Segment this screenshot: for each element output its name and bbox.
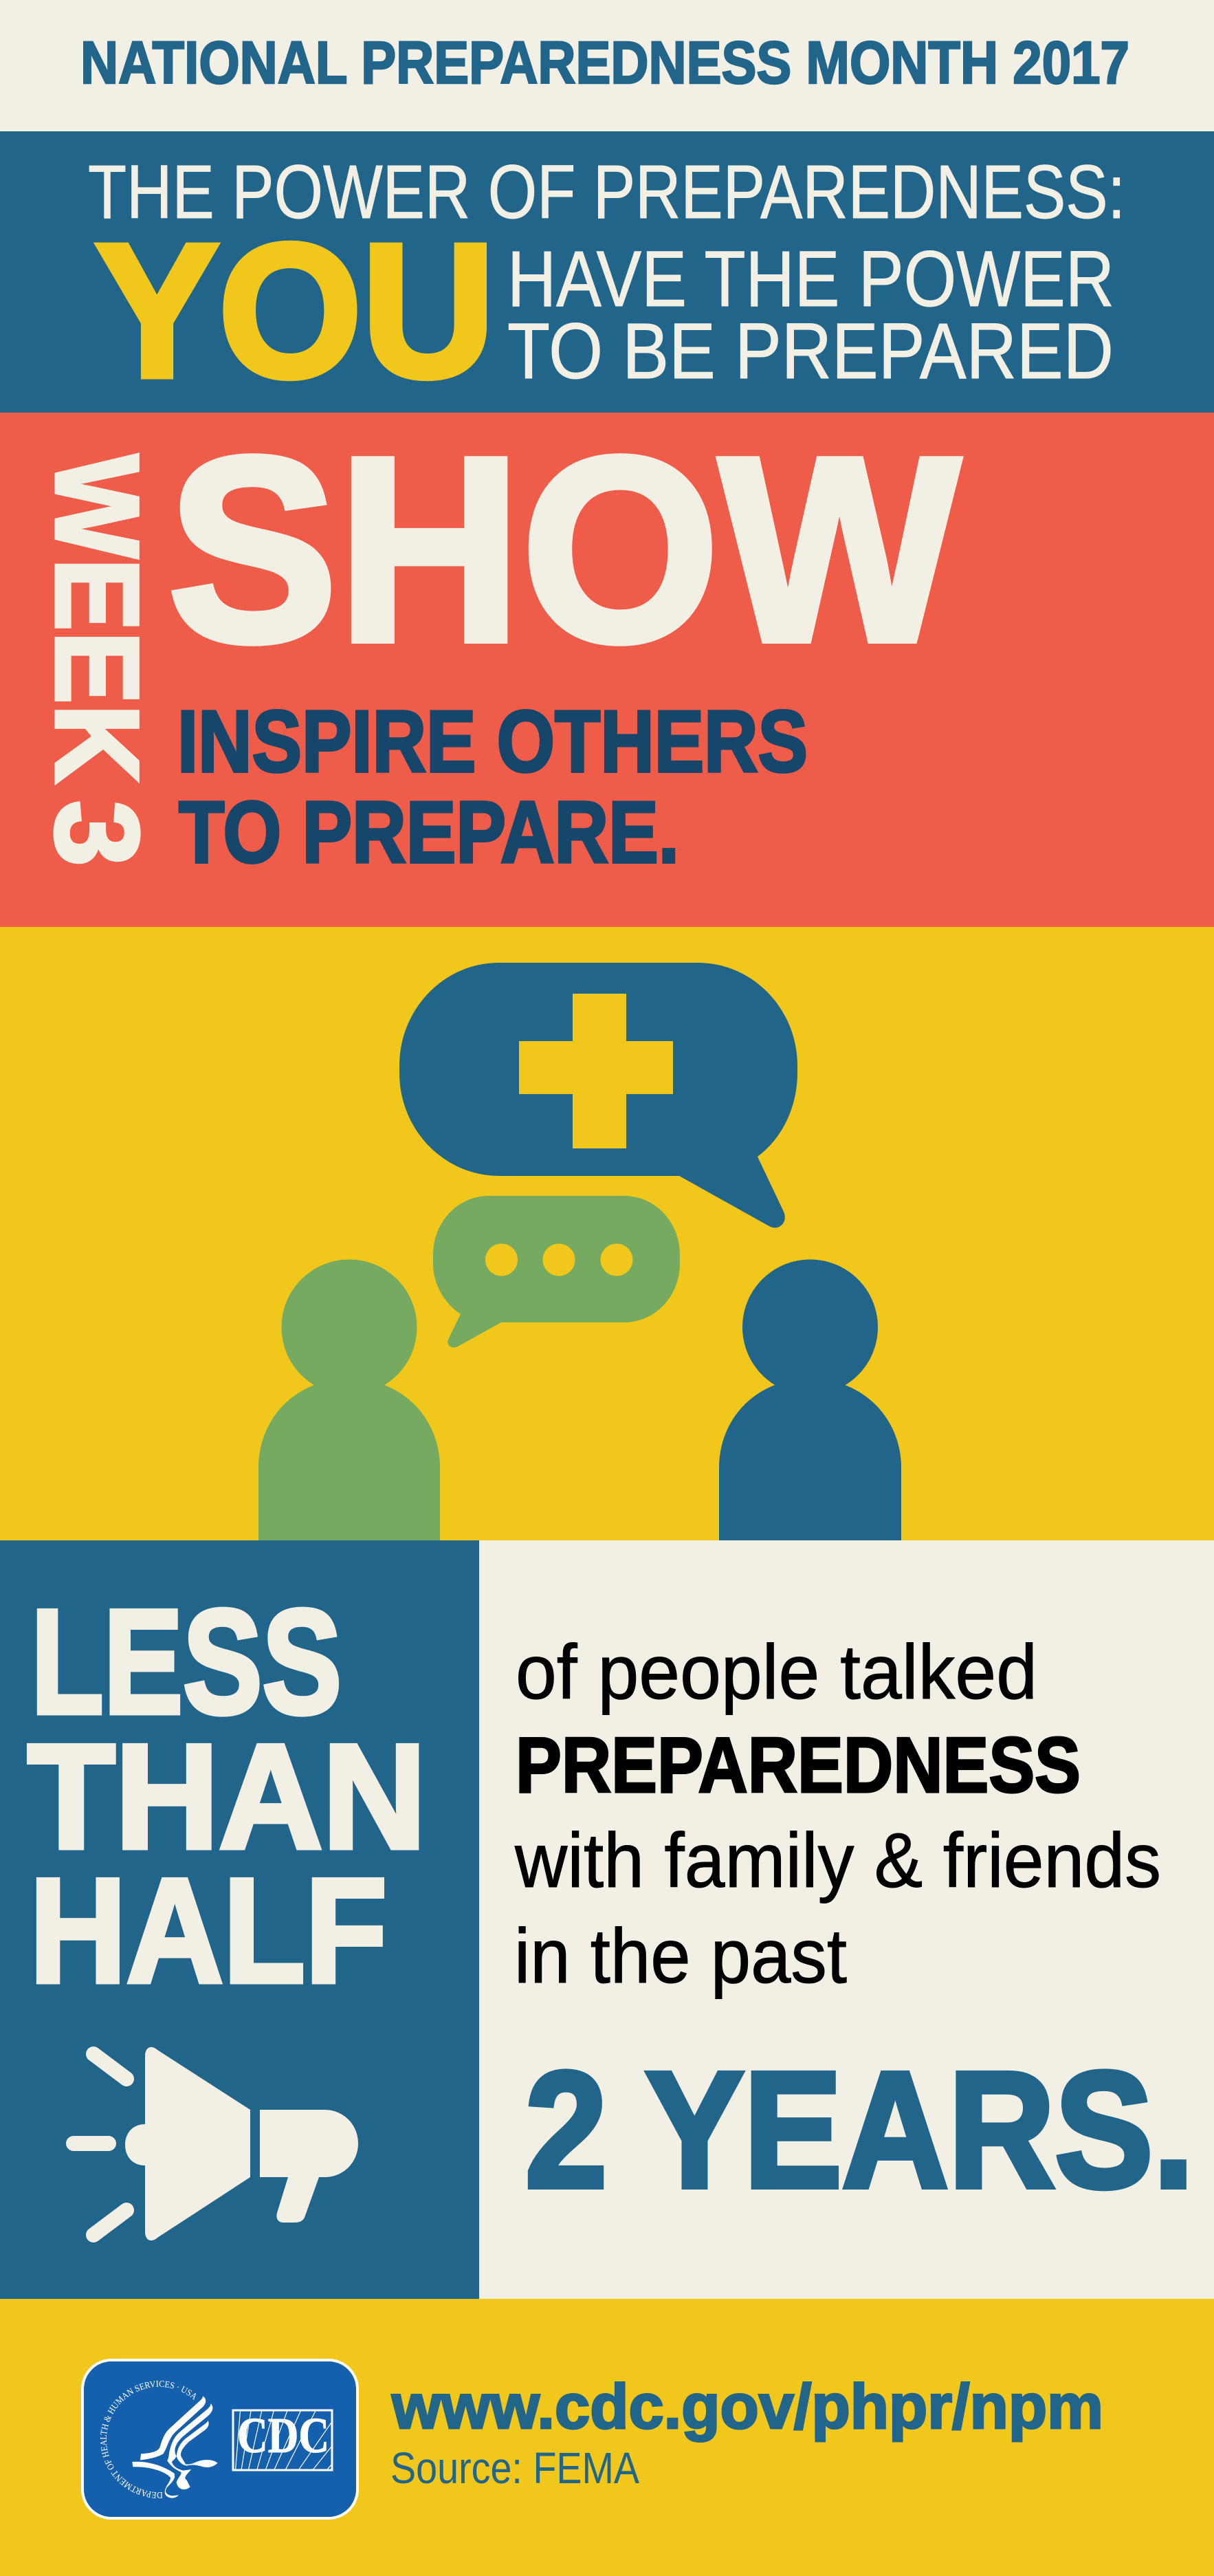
logo: HHS seal: DEPARTMENT OF HEALTH & HUMAN SERVICES · USA bbox=[100, 2381, 196, 2498]
panel: illustration bbox=[0, 927, 1214, 1540]
text: source: Source: FEMA bbox=[390, 2443, 639, 2493]
icon: small speech bubble with dots bbox=[433, 1196, 680, 1348]
text: inspire others: INSPIRE OTHERS bbox=[177, 692, 808, 790]
heading: show: SHOW bbox=[168, 402, 962, 696]
text: less than half: HALF bbox=[30, 1847, 387, 2013]
vertical label: week 3: 3 bbox=[31, 800, 163, 866]
panel: top title band bbox=[0, 0, 1214, 131]
panel: theme band bbox=[0, 131, 1214, 417]
panel: footer bbox=[0, 2299, 1214, 2576]
icon: blue person bbox=[719, 1260, 901, 1540]
text: url: www.cdc.gov/phpr/npm bbox=[391, 2372, 1103, 2442]
text: to prepare: TO PREPARE. bbox=[179, 783, 679, 881]
text: less than half bbox=[27, 1578, 426, 2013]
text: of people talked: of people talked bbox=[516, 1629, 1037, 1715]
text: with family and friends: with family & friends bbox=[514, 1818, 1161, 1903]
text: less than half: LESS bbox=[31, 1578, 342, 1745]
panel: week 3 band bbox=[0, 402, 1214, 927]
text: have the power: HAVE THE POWER bbox=[507, 235, 1114, 323]
logo: HHS and CDC bbox=[81, 2359, 359, 2520]
text: less than half: THAN bbox=[27, 1713, 426, 1879]
vertical label: week 3: WEEK bbox=[31, 455, 163, 783]
icon: green person bbox=[258, 1260, 440, 1540]
icon: megaphone bbox=[74, 2047, 358, 2240]
text: in the past: in the past bbox=[514, 1913, 847, 1999]
logo: CDC: CDC bbox=[237, 2408, 329, 2463]
panel: statistic text bbox=[479, 1540, 1214, 2299]
text: preparedness: PREPAREDNESS bbox=[516, 1722, 1081, 1809]
panel: less than half bbox=[0, 1540, 479, 2299]
icon: large speech bubble with plus bbox=[399, 963, 797, 1227]
text: to be prepared: TO BE PREPARED bbox=[507, 307, 1114, 395]
heading: you: YOU bbox=[96, 205, 495, 417]
